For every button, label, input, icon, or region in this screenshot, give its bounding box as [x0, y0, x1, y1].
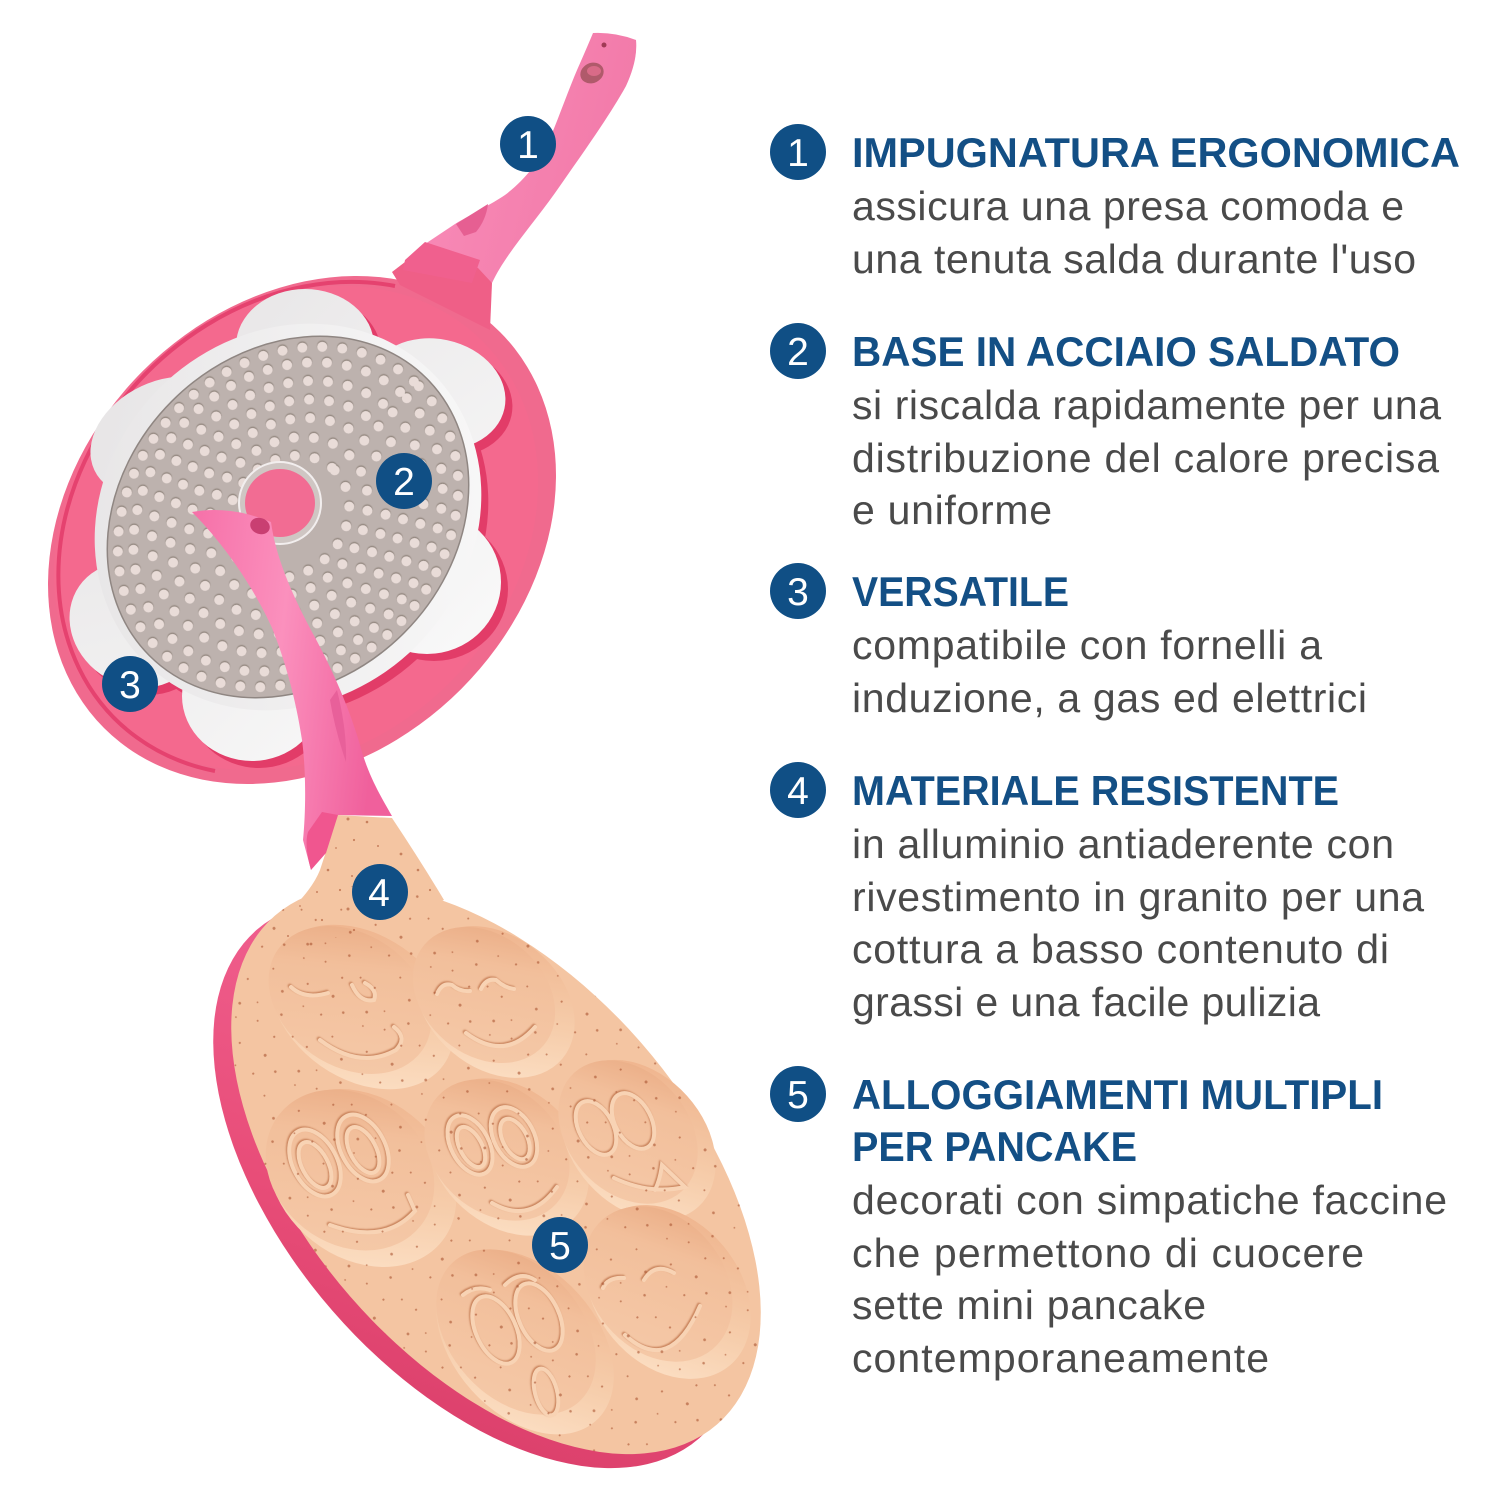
description 1: assicura una presa comoda e [852, 183, 1404, 229]
description 4: grassi e una facile pulizia [852, 979, 1320, 1025]
description 4: in alluminio antiaderente con [852, 821, 1394, 867]
description 5 [852, 1177, 1447, 1381]
copper surface [129, 789, 863, 1500]
cooking wells [232, 891, 785, 1469]
heading 5: ALLOGGIAMENTI MULTIPLI [852, 1071, 1383, 1118]
heading 1: IMPUGNATURA ERGONOMICA [852, 129, 1460, 176]
pan body [0, 173, 659, 887]
lower pan handle [192, 510, 392, 870]
granite speckle [129, 789, 863, 1500]
description 4 [852, 821, 1424, 1025]
callout marker 1 [500, 116, 556, 172]
flower plate shadow [22, 251, 568, 797]
feature 4: resistant material [770, 762, 1424, 1025]
number badge 4: 4 [787, 770, 809, 813]
well 1 [239, 891, 485, 1123]
heading 4: MATERIALE RESISTENTE [852, 767, 1339, 814]
heading 5 [852, 1071, 1383, 1170]
description 2: distribuzione del calore precisa [852, 435, 1439, 481]
heading 2: BASE IN ACCIAIO SALDATO [852, 328, 1400, 375]
description 3: compatibile con fornelli a [852, 622, 1322, 668]
centre hole [239, 462, 321, 544]
feature 3: versatile [770, 563, 1367, 721]
pan inner surface [0, 187, 637, 869]
pan: pancake front view [111, 510, 863, 1500]
description 4: rivestimento in granito per una [852, 874, 1424, 920]
number badge 5 [770, 1066, 826, 1122]
number badge 2: 2 [787, 331, 809, 374]
description 1 [852, 183, 1416, 282]
callout marker 3 [102, 656, 158, 712]
number badge 1 [770, 124, 826, 180]
description 5: decorati con simpatiche faccine [852, 1177, 1447, 1223]
flower plate [15, 244, 561, 790]
number badge 3: 3 [787, 571, 809, 614]
number badge 3 [770, 563, 826, 619]
embossed smiley faces [279, 980, 700, 1418]
well 2 [385, 895, 605, 1109]
pan: back view with flower base [0, 33, 659, 887]
well 4 [396, 1046, 620, 1268]
description 2: e uniforme [852, 487, 1052, 533]
description 2 [852, 382, 1441, 533]
number badge 2 [770, 323, 826, 379]
steel induction disc [33, 262, 543, 772]
callout marker 4: 4 [368, 872, 390, 915]
pan inner rim line [58, 282, 395, 771]
callout marker 1: 1 [517, 124, 539, 167]
description 4: cottura a basso contenuto di [852, 926, 1389, 972]
description 3 [852, 622, 1367, 721]
callout marker 3: 3 [119, 664, 141, 707]
callout marker 4 [352, 864, 408, 920]
disc dots [48, 277, 528, 757]
heading 5: PER PANCAKE [852, 1123, 1137, 1170]
description 1: una tenuta salda durante l'uso [852, 236, 1416, 282]
description 2: si riscalda rapidamente per una [852, 382, 1441, 428]
well 7 [551, 1172, 785, 1412]
number badge 4 [770, 762, 826, 818]
upper pan handle [392, 33, 636, 330]
callout marker 5 [532, 1217, 588, 1273]
callout marker 2 [376, 453, 432, 509]
description 3: induzione, a gas ed elettrici [852, 675, 1367, 721]
callout marker 2: 2 [393, 461, 415, 504]
feature 1: ergonomic handle [770, 124, 1460, 282]
feature 5: multiple pancake moulds [770, 1066, 1447, 1381]
description 5: contemporaneamente [852, 1335, 1269, 1381]
number badge 1: 1 [787, 132, 809, 175]
feature 2: welded steel base [770, 323, 1441, 533]
number badge 5: 5 [787, 1074, 809, 1117]
pink outer rim [111, 803, 845, 1500]
description 5: sette mini pancake [852, 1282, 1206, 1328]
callout marker 5: 5 [549, 1225, 571, 1268]
well 5 [529, 1029, 747, 1251]
well 6 [401, 1215, 649, 1469]
well 3 [232, 1052, 492, 1304]
description 5: che permettono di cuocere [852, 1230, 1364, 1276]
heading 3: VERSATILE [852, 568, 1069, 615]
